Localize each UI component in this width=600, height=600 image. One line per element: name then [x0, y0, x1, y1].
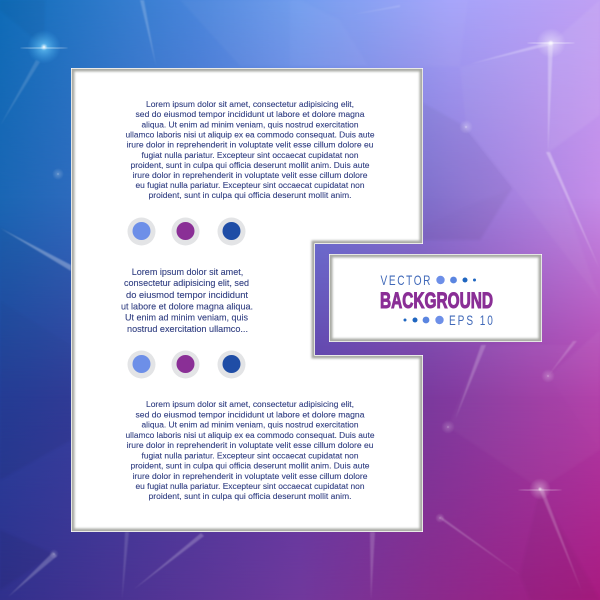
panel: main white notched card — [71, 68, 423, 532]
text block: bottom paragraph: ullamco laboris nisi ut aliquip ex ea commodo consequat. Duis aute — [126, 430, 375, 440]
title: BACKGROUND: BACKGROUND — [380, 288, 493, 313]
text block: middle paragraph: consectetur adipisicing elit, sed — [124, 278, 249, 288]
text block: top paragraph: proident, sunt in culpa qui officia deserunt mollit anim. Duis aute — [130, 160, 370, 170]
text block: bottom paragraph: eu fugiat nulla pariatur. Excepteur sint occaecat cupidatat non — [136, 481, 365, 491]
text block: top paragraph: proident, sunt in culpa qui officia deserunt mollit anim. — [148, 190, 352, 200]
text block: top paragraph: sed do eiusmod tempor incididunt ut labore et dolore magna — [136, 109, 365, 119]
text block: bottom paragraph: proident, sunt in culpa qui officia deserunt mollit anim. — [148, 491, 352, 501]
text block: top paragraph: irure dolor in reprehenderit in voluptate velit esse cillum dolore eu — [126, 140, 374, 150]
text block: top paragraph: irure dolor in reprehenderit in voluptate velit esse cillum dolore — [132, 170, 368, 180]
icons: bottom row of dots — [128, 350, 246, 378]
text block: top paragraph: fugiat nulla pariatur. Excepteur sint occaecat cupidatat non — [142, 150, 359, 160]
panel: title card — [329, 254, 542, 342]
text block: middle paragraph: Lorem ipsum dolor sit amet, — [132, 267, 243, 277]
text block: bottom paragraph: fugiat nulla pariatur. Excepteur sint occaecat cupidatat non — [142, 450, 359, 460]
text block: bottom paragraph: aliqua. Ut enim ad minim veniam, quis nostrud exercitation — [142, 420, 359, 430]
text block: middle paragraph: ut labore et dolore magna aliqua. — [121, 302, 253, 312]
title: EPS 10: EPS 10 — [449, 312, 493, 328]
text block: top paragraph: eu fugiat nulla pariatur. Excepteur sint occaecat cupidatat non — [136, 180, 365, 190]
text block: bottom paragraph: proident, sunt in culpa qui officia deserunt mollit anim. Duis aute — [130, 460, 370, 470]
text block: bottom paragraph: irure dolor in reprehenderit in voluptate velit esse cillum dolore — [132, 471, 368, 481]
text block: bottom paragraph: sed do eiusmod tempor incididunt ut labore et dolore magna — [136, 410, 365, 420]
text block: middle paragraph — [121, 267, 253, 334]
icons: top row of dots — [128, 218, 246, 246]
text block: top paragraph: Lorem ipsum dolor sit amet, consectetur adipisicing elit, — [146, 99, 354, 109]
text block: top paragraph: ullamco laboris nisi ut aliquip ex ea commodo consequat. Duis aute — [126, 130, 375, 140]
text block: bottom paragraph: irure dolor in reprehenderit in voluptate velit esse cillum dolore eu — [126, 440, 374, 450]
text block: bottom paragraph: Lorem ipsum dolor sit amet, consectetur adipisicing elit, — [146, 399, 354, 409]
text block: top paragraph — [126, 99, 375, 200]
icon: dots before EPS 10 — [404, 316, 444, 324]
title: VECTOR: VECTOR — [380, 272, 431, 288]
text block: middle paragraph: Ut enim ad minim veniam, quis — [125, 312, 248, 322]
icon: dots after VECTOR — [436, 276, 476, 284]
text block: top paragraph: aliqua. Ut enim ad minim veniam, quis nostrud exercitation — [142, 120, 359, 130]
text block: bottom paragraph — [126, 399, 375, 501]
text block: middle paragraph: do eiusmod tempor incididunt — [126, 290, 248, 300]
text block: middle paragraph: nostrud exercitation ullamco... — [127, 324, 248, 334]
